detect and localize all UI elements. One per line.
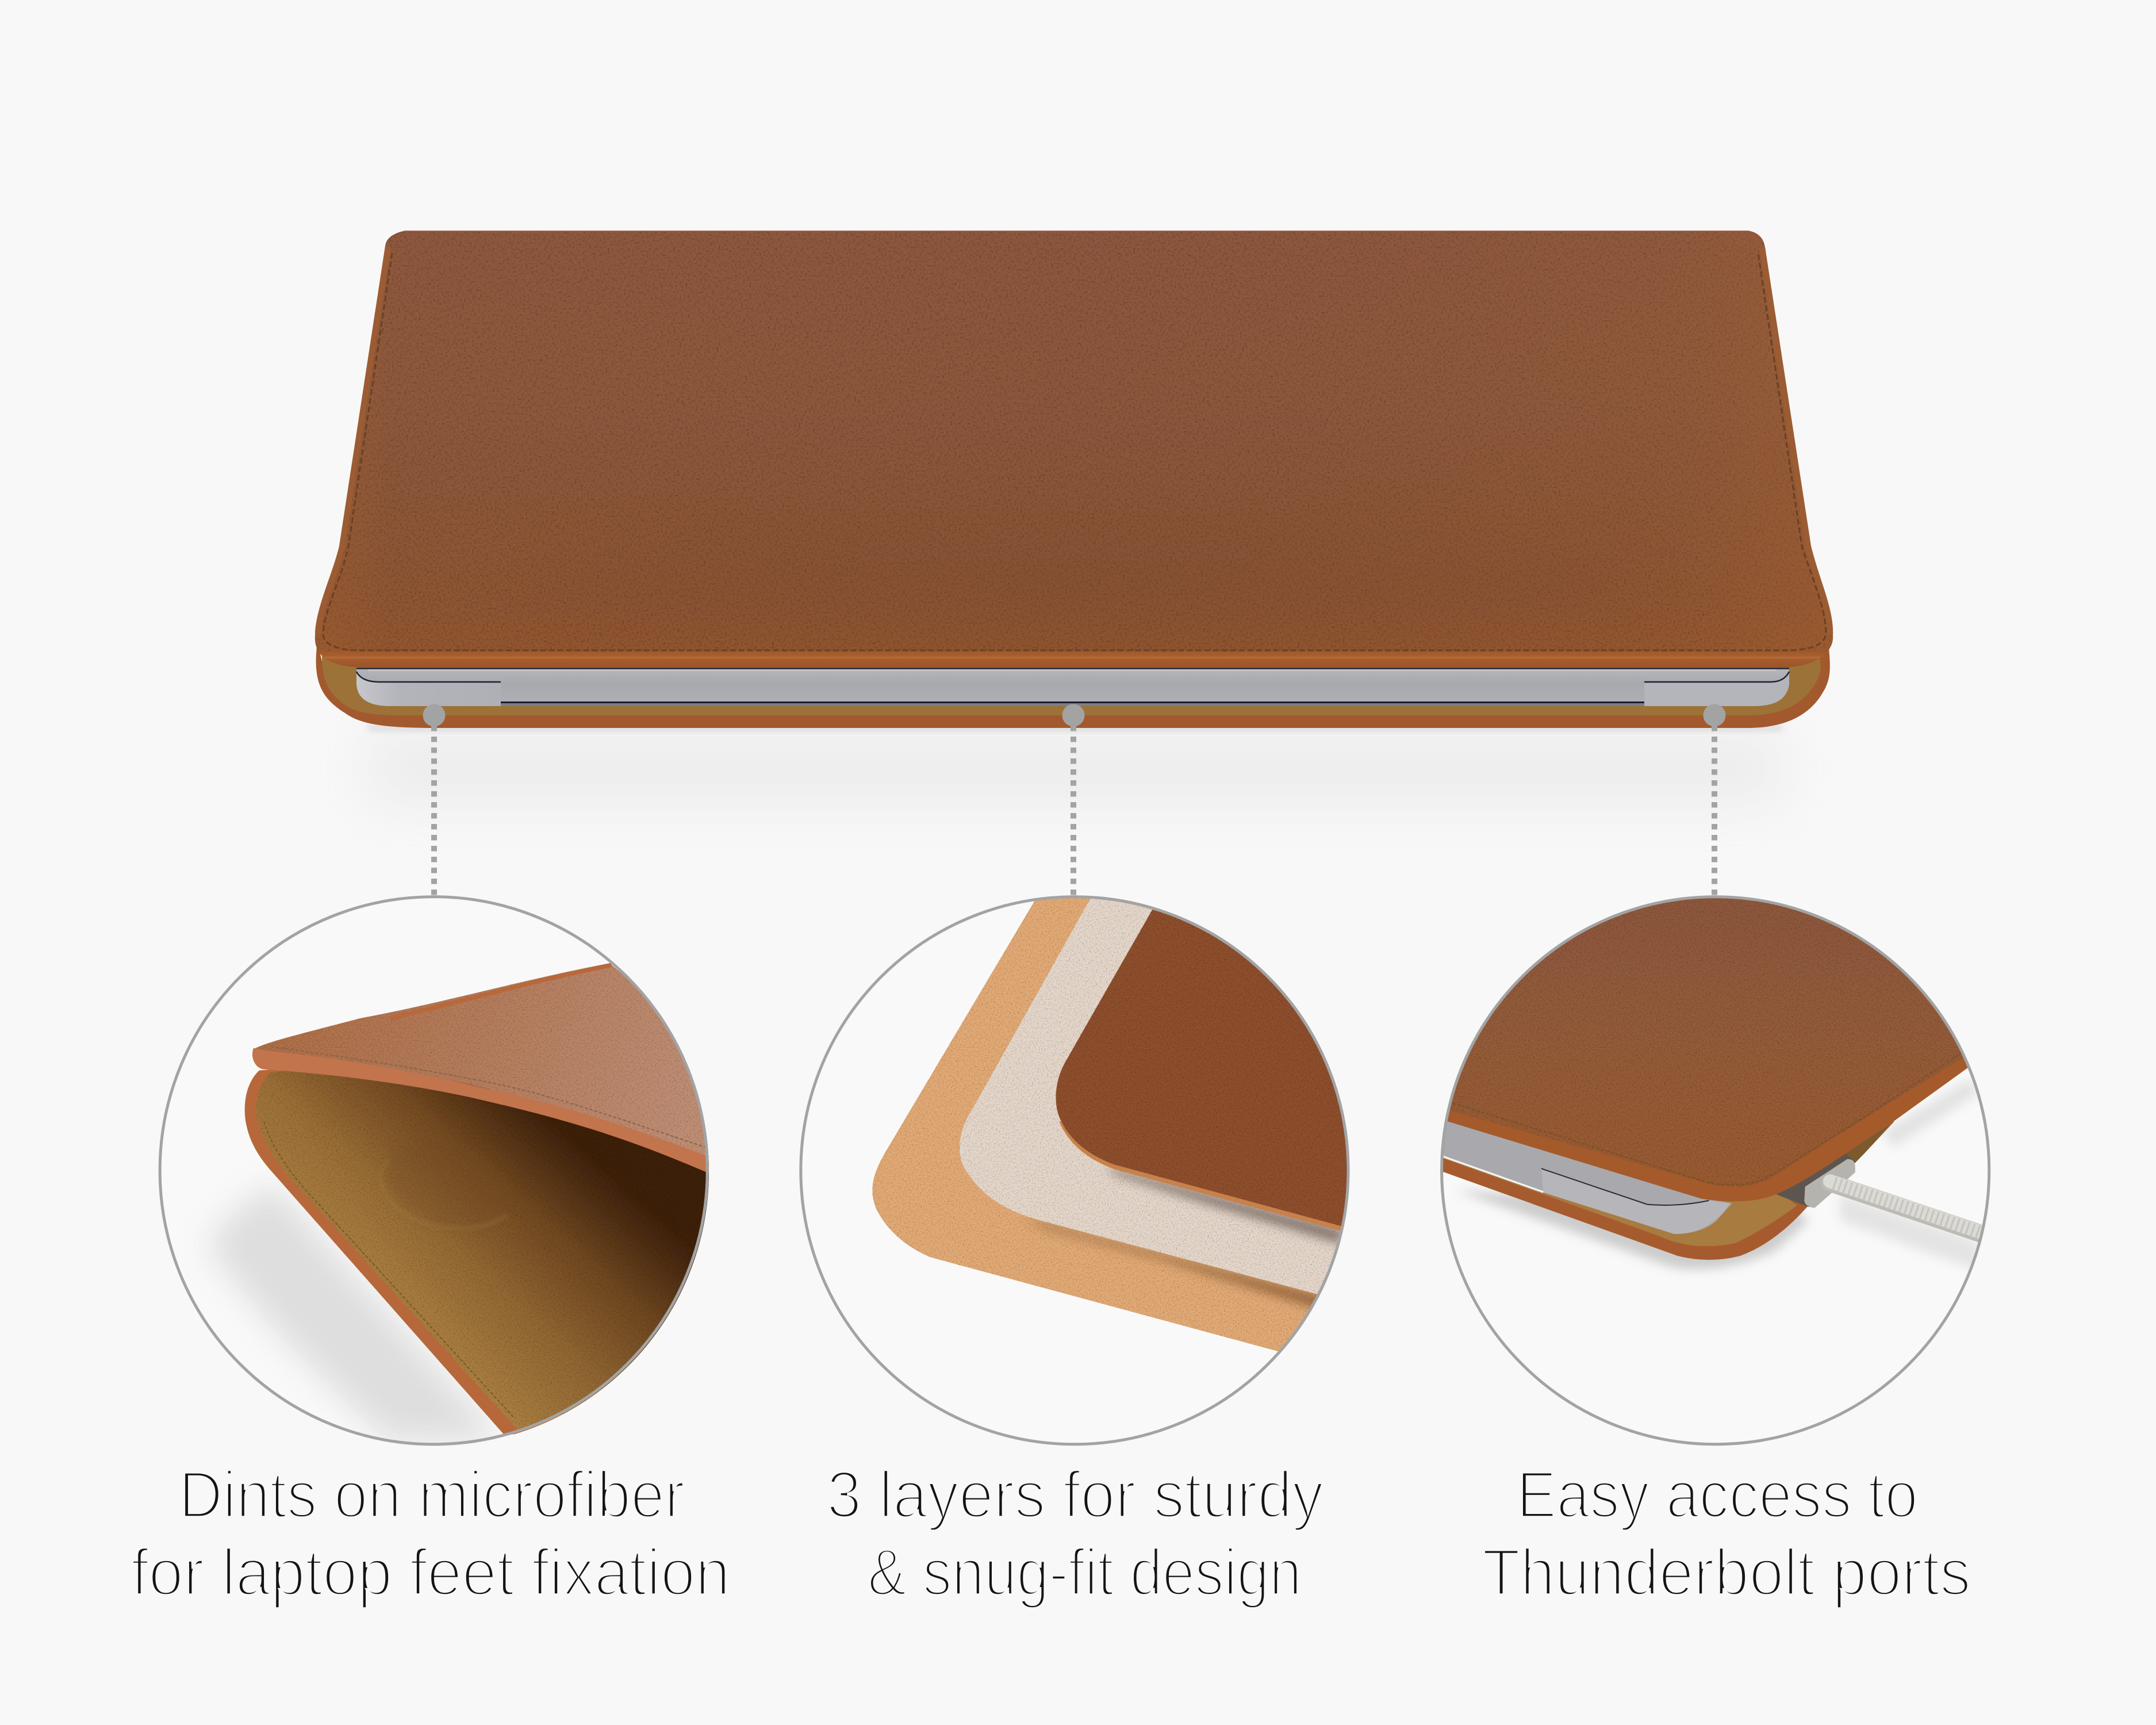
- leather rim: [1447, 1044, 2001, 1201]
- lining stitching: [264, 1121, 513, 1417]
- detail circle 3: Thunderbolt port access: [1409, 881, 2024, 1459]
- sleeve ground shadow: [368, 726, 1782, 802]
- lower flap: [1440, 1121, 1894, 1260]
- laptop corner cover: [1541, 1168, 1730, 1234]
- canvas layer: [960, 885, 1392, 1295]
- caption: centre: 3 layers for sturdy: [827, 1458, 1323, 1532]
- laptop edge: [356, 668, 1789, 706]
- caption: left: for laptop feet fixation: [131, 1536, 730, 1609]
- top flap stitching: [271, 1046, 706, 1148]
- stitching: [1453, 1053, 1961, 1185]
- caption: right: [1482, 1458, 1971, 1609]
- detail circle 1: microfiber interior with laptop-foot dint: [159, 895, 709, 1446]
- microfiber layer: [872, 885, 1392, 1363]
- dotted connector line: centre: [1071, 726, 1076, 897]
- connector: [1774, 1153, 1855, 1208]
- connector dot: right: [1703, 704, 1726, 727]
- dotted connector line: left: [431, 726, 437, 897]
- top flap leather: [252, 963, 721, 1167]
- right-side darkening: [256, 1059, 721, 1429]
- braided cable: [1830, 1181, 1984, 1235]
- circle 3 outline: [1442, 897, 1989, 1444]
- leather cut edge: [1059, 1121, 1392, 1231]
- infographic: leather laptop sleeve with three detail callouts: [133, 231, 1990, 1608]
- caption: right: Thunderbolt ports: [1482, 1536, 1971, 1609]
- top flap front rim: [252, 1048, 709, 1174]
- shadow of canvas layer: [1023, 1218, 1323, 1309]
- caption: left: Dints on microfiber: [179, 1458, 685, 1532]
- caption: centre: [827, 1458, 1323, 1609]
- caption: centre: & snug-fit design: [868, 1536, 1302, 1609]
- circle 2 outline: [801, 897, 1348, 1444]
- laptop edge lines: [1441, 1156, 1709, 1205]
- laptop body: [1440, 1118, 1732, 1234]
- connector dot: left: [423, 704, 445, 727]
- top flap far edge: [390, 965, 612, 1018]
- circle 1 outline: [160, 897, 707, 1444]
- shadow of leather layer: [1107, 1167, 1342, 1244]
- main product photo: leather sleeve with laptop inside: [310, 227, 1840, 728]
- caption: right: Easy access to: [1517, 1458, 1918, 1532]
- back flap leather rim: [245, 1059, 721, 1434]
- caption: left: [131, 1458, 730, 1609]
- leather layer: [1056, 901, 1392, 1226]
- stitching along flap edge: [323, 253, 1826, 650]
- table shadow: [1455, 1078, 1978, 1271]
- main leather flap: [1432, 885, 2001, 1201]
- upper leather flap: [310, 227, 1840, 670]
- microfiber lining: [1440, 1157, 1797, 1246]
- dotted connector line: right: [1712, 726, 1717, 897]
- laptop-foot dint: [370, 1124, 522, 1248]
- table shadow: [209, 1186, 502, 1440]
- connector dot: centre: [1062, 704, 1084, 727]
- lower sleeve flap: [316, 641, 1830, 728]
- microfiber interior: [322, 656, 1821, 715]
- detail circle 2: three material layers: [776, 881, 1392, 1459]
- microfiber lining: [256, 1059, 721, 1429]
